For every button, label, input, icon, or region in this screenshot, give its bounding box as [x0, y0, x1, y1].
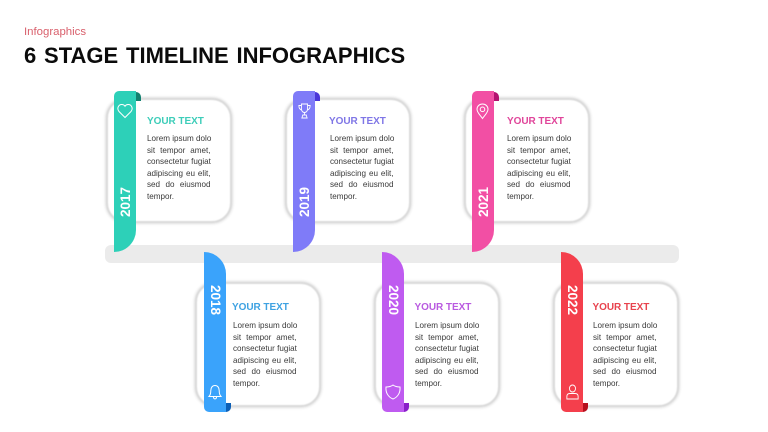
- heading: YOUR TEXT: [507, 116, 564, 127]
- body text: sed do eiusmod: [507, 180, 570, 189]
- body text: [147, 134, 212, 201]
- panel: 2018: [194, 252, 322, 412]
- body text: adipiscing eu elit,: [593, 356, 656, 365]
- ribbon: [561, 252, 583, 412]
- body text: [330, 134, 394, 201]
- body text: [415, 321, 480, 388]
- body text: Lorem ipsum dolo: [330, 134, 394, 143]
- body text: consectetur fugiat: [415, 344, 479, 353]
- icon: shield: [385, 384, 401, 400]
- ribbon fold: [311, 92, 320, 101]
- panel: 2017: [104, 91, 234, 252]
- card outline: [285, 98, 411, 223]
- body text: [507, 134, 572, 201]
- body text: sit tempor amet,: [415, 333, 478, 342]
- body text: tempor.: [233, 379, 260, 388]
- body text: Lorem ipsum dolo: [147, 134, 211, 143]
- year: 2022: [565, 285, 580, 315]
- heading: YOUR TEXT: [329, 116, 386, 127]
- icon: heart: [117, 104, 133, 118]
- year: 2019: [296, 187, 312, 217]
- year: 2018: [208, 285, 223, 315]
- body text: adipiscing eu elit,: [507, 169, 570, 178]
- year: 2021: [476, 187, 490, 217]
- panel: 2020: [372, 252, 502, 412]
- body text: sit tempor amet,: [147, 146, 210, 155]
- body text: Lorem ipsum dolo: [507, 134, 571, 143]
- body text: adipiscing eu elit,: [415, 356, 478, 365]
- icon: trophy: [298, 104, 311, 118]
- panel: 2022: [552, 252, 680, 412]
- body text: consectetur fugiat: [593, 344, 657, 353]
- ribbon fold: [400, 403, 409, 412]
- body text: Lorem ipsum dolo: [233, 321, 297, 330]
- ribbon fold: [579, 403, 588, 412]
- eyebrow label: Infographics: [24, 26, 86, 38]
- body text: adipiscing eu elit,: [330, 169, 394, 178]
- body text: sit tempor amet,: [330, 146, 394, 155]
- body text: Lorem ipsum dolo: [415, 321, 479, 330]
- body text: sed do eiusmod: [415, 367, 478, 376]
- card outline: [374, 282, 500, 407]
- body text: tempor.: [415, 379, 442, 388]
- panel: 2019: [284, 91, 412, 252]
- year: 2020: [386, 285, 401, 315]
- ribbon: [114, 91, 136, 252]
- body text: consectetur fugiat: [507, 157, 571, 166]
- body text: consectetur fugiat: [233, 344, 297, 353]
- body text: consectetur fugiat: [147, 157, 211, 166]
- card outline: [464, 98, 590, 223]
- body text: sed do eiusmod: [233, 367, 296, 376]
- icon: bell: [208, 385, 222, 400]
- heading: YOUR TEXT: [414, 302, 471, 313]
- icon: person: [566, 384, 579, 400]
- timeline bar: [105, 245, 679, 263]
- title: 6 STAGE TIMELINE INFOGRAPHICS: [24, 43, 405, 68]
- heading: YOUR TEXT: [592, 302, 649, 313]
- body text: sit tempor amet,: [593, 333, 656, 342]
- ribbon: [472, 91, 494, 252]
- card outline: [553, 282, 679, 407]
- body text: tempor.: [507, 192, 534, 201]
- body text: tempor.: [330, 192, 357, 201]
- body text: [593, 321, 658, 388]
- panel: 2021: [462, 91, 592, 252]
- body text: adipiscing eu elit,: [233, 356, 296, 365]
- ribbon fold: [490, 92, 499, 101]
- ribbon fold: [132, 92, 141, 101]
- body text: sed do eiusmod: [593, 367, 656, 376]
- heading: YOUR TEXT: [232, 302, 289, 313]
- body text: sed do eiusmod: [330, 180, 394, 189]
- card outline: [195, 282, 321, 407]
- ribbon fold: [221, 403, 231, 412]
- icon: map pin: [476, 104, 488, 120]
- year: 2017: [118, 187, 132, 217]
- ribbon: [204, 252, 226, 412]
- body text: tempor.: [147, 192, 174, 201]
- body text: sed do eiusmod: [147, 180, 210, 189]
- ribbon: [293, 91, 315, 252]
- body text: sit tempor amet,: [233, 333, 296, 342]
- ribbon: [382, 252, 404, 412]
- body text: [233, 321, 298, 388]
- body text: consectetur fugiat: [330, 157, 394, 166]
- body text: Lorem ipsum dolo: [593, 321, 657, 330]
- heading: YOUR TEXT: [147, 116, 204, 127]
- card outline: [106, 98, 232, 223]
- body text: tempor.: [593, 379, 620, 388]
- body text: sit tempor amet,: [507, 146, 570, 155]
- body text: adipiscing eu elit,: [147, 169, 210, 178]
